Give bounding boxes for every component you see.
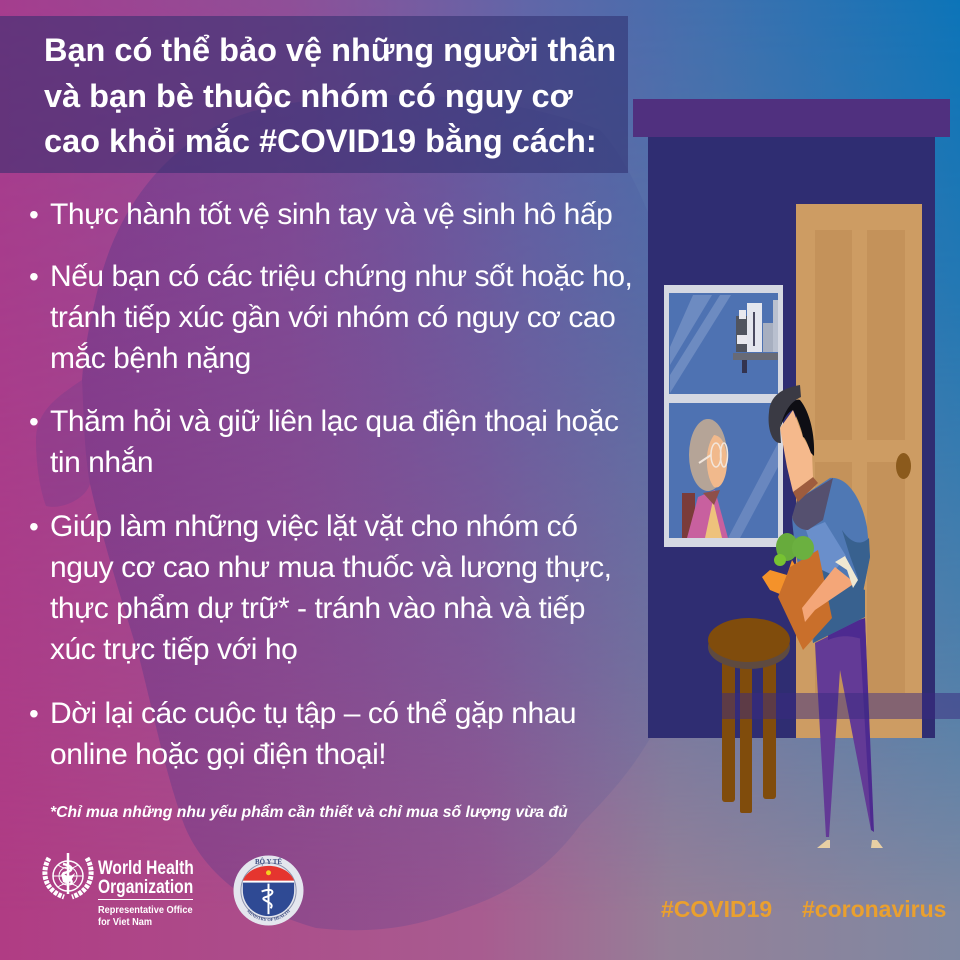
background blob [82, 95, 655, 930]
heading banner [0, 16, 628, 173]
bag [778, 550, 832, 650]
WHO office: Representative Office [98, 905, 193, 916]
door [796, 204, 922, 738]
bullet 4: nguy cơ cao như mua thuốc và lương thực, [50, 551, 612, 584]
bullet 2: mắc bệnh nặng [50, 342, 251, 375]
hashtag coronavirus: #coronavirus [802, 896, 946, 922]
heading text: Bạn có thể bảo vệ những người thân [44, 32, 616, 68]
icon: Ministry of Health seal: BỘ Y TẾ [255, 858, 282, 866]
bullet 3: tin nhắn [50, 446, 153, 479]
heading text: cao khỏi mắc #COVID19 bằng cách: [44, 123, 597, 159]
bullet 4: xúc trực tiếp với họ [50, 633, 297, 666]
bullet 2: tránh tiếp xúc gần với nhóm có nguy cơ cao [50, 301, 615, 334]
lighter chest [806, 522, 846, 585]
WHO logo [42, 853, 194, 928]
bullet 4 [29, 510, 612, 666]
feet [817, 840, 830, 848]
footnote: *Chỉ mua những nhu yếu phẩm cần thiết và chỉ mua số lượng vừa đủ [50, 804, 568, 821]
scarf [792, 478, 833, 530]
bullet 4: thực phẩm dự trữ* - tránh vào nhà và tiếp [50, 592, 585, 625]
arm [802, 567, 855, 622]
man with grocery bag [762, 385, 883, 848]
heading text: và bạn bè thuộc nhóm có nguy cơ [44, 78, 573, 114]
hashtag COVID19: #COVID19 [661, 896, 772, 922]
door scene [633, 99, 960, 848]
wall [648, 130, 935, 738]
bullet 5: • [29, 698, 39, 729]
WHO office [98, 905, 193, 928]
face [780, 410, 813, 492]
bullet 5 [29, 697, 576, 771]
bullet 4: Giúp làm những việc lặt vặt cho nhóm có [50, 510, 577, 543]
bullet 3 [29, 405, 619, 479]
carrots [762, 560, 798, 597]
sleeve cuff [835, 556, 858, 588]
bullet 3: • [29, 406, 39, 437]
legs [815, 618, 873, 837]
WHO name: Organization [98, 877, 193, 898]
roof canopy [633, 99, 950, 137]
neck [793, 477, 818, 502]
bullet 1: • [29, 199, 39, 230]
dark lower jacket [813, 570, 865, 643]
bullet 1: Thực hành tốt vệ sinh tay và vệ sinh hô hấp [50, 198, 612, 231]
bullet 2 [29, 260, 632, 375]
heading text [44, 32, 616, 159]
bullet 4: • [29, 511, 39, 542]
dark sleeve [842, 530, 870, 597]
icon: WHO emblem [42, 853, 94, 900]
bullet 2: Nếu bạn có các triệu chứng như sốt hoặc ho, [50, 260, 632, 293]
WHO name [98, 858, 194, 898]
hair [780, 400, 814, 456]
background blob lobe [36, 380, 90, 507]
bullet 5: Dời lại các cuộc tụ tập – có thể gặp nhau [50, 697, 576, 730]
bullet 2: • [29, 261, 39, 292]
door knob [896, 453, 911, 479]
window [664, 285, 783, 547]
WHO office: for Viet Nam [98, 917, 152, 928]
door lower band [722, 693, 960, 719]
bullet 3: Thăm hỏi và giữ liên lạc qua điện thoại hoặc [50, 405, 619, 438]
stool [708, 618, 790, 813]
icon: Ministry of Health seal: MINISTRY OF HEALTH [246, 909, 290, 922]
greens [774, 533, 814, 566]
bullet 5: online hoặc gọi điện thoại! [50, 738, 386, 771]
shelf with medicine [733, 300, 778, 373]
elderly woman [682, 419, 728, 538]
torso [792, 478, 870, 643]
WHO name: World Health [98, 858, 194, 879]
icon: Ministry of Health seal [234, 856, 304, 926]
WHO divider [98, 899, 193, 900]
